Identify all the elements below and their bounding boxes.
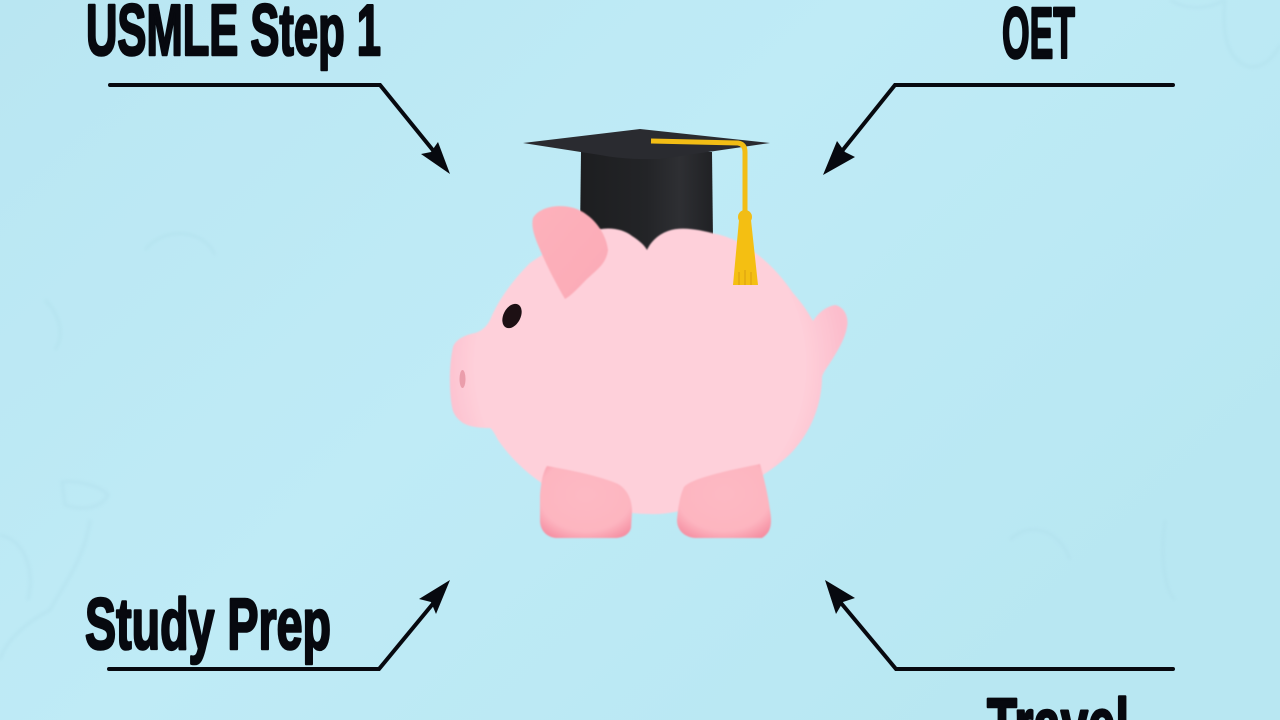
icon: pig eye bbox=[498, 301, 526, 331]
heading: Study Prep: Study Prep bbox=[85, 585, 331, 665]
icon: pig body bbox=[450, 229, 848, 514]
icon: tassel bbox=[651, 141, 758, 285]
piggy bank with graduation cap bbox=[450, 129, 848, 538]
icon: graduation cap crown bbox=[580, 152, 713, 254]
icon: pig ear bbox=[532, 206, 608, 299]
arrow: Travel to piggy bank bbox=[825, 580, 1173, 669]
arrow: OET to piggy bank bbox=[823, 85, 1173, 175]
icon: rear foot bbox=[677, 464, 771, 538]
arrow: USMLE Step 1 to piggy bank bbox=[110, 85, 450, 174]
icon: front foot bbox=[540, 466, 632, 538]
icon: pig nostril bbox=[460, 370, 466, 388]
arrow: Study Prep to piggy bank bbox=[109, 580, 450, 669]
icon: graduation cap board bbox=[523, 129, 770, 159]
